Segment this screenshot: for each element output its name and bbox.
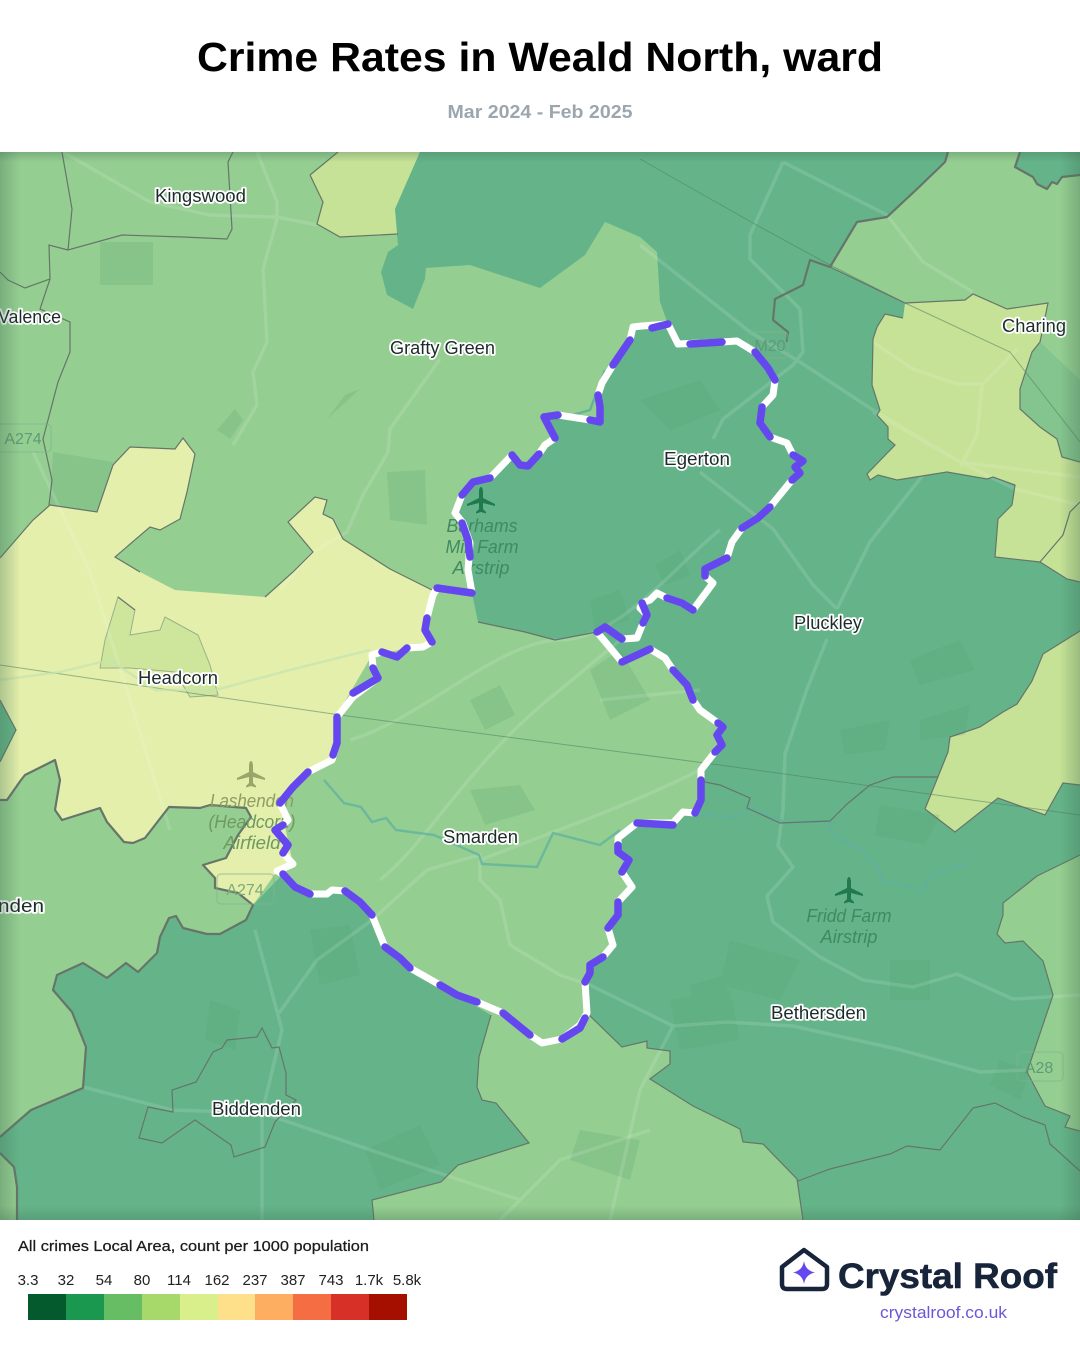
place labels: Biddenden xyxy=(212,1099,301,1119)
region: Headcorn centre xyxy=(100,597,218,697)
legend title: All crimes Local Area, count per 1000 population xyxy=(18,1239,369,1255)
place labels: Kingswood xyxy=(155,186,246,206)
region: Charing xyxy=(867,294,1080,582)
legend scale labels: 80 xyxy=(134,1272,150,1289)
legend xyxy=(18,1239,422,1320)
airstrip: Lashenden (Headcorn) Airfield: (Headcorn) xyxy=(208,812,296,832)
region: dark green north, Egerton, Pluckley, Bethersden xyxy=(381,152,1080,1220)
airstrip: Barhams Mill Farm: Barhams xyxy=(446,516,518,536)
railway line xyxy=(0,159,1080,815)
legend scale labels: 1.7k xyxy=(355,1272,384,1289)
subtitle: date range: Mar 2024 - Feb 2025 xyxy=(448,102,632,122)
place labels xyxy=(0,186,1066,1119)
icon: house with star xyxy=(782,1250,827,1289)
airstrip: Lashenden (Headcorn) Airfield xyxy=(208,761,296,853)
road label A274 west: A274 xyxy=(4,431,42,448)
airstrip: Fridd Farm: Airstrip xyxy=(819,927,878,947)
place labels: Smarden xyxy=(443,827,518,847)
legend scale labels: 743 xyxy=(318,1272,344,1289)
region: dark green Biddenden xyxy=(0,874,529,1220)
airstrip: Lashenden (Headcorn) Airfield: Lashenden xyxy=(210,791,294,811)
region: north pale patch xyxy=(310,152,420,237)
logo wordmark: Crystal Roof xyxy=(838,1257,1057,1296)
place labels: Headcorn xyxy=(138,668,218,688)
legend scale labels xyxy=(18,1272,422,1289)
place labels: Egerton xyxy=(664,449,730,469)
place labels: Charing xyxy=(1002,316,1066,336)
airstrip: Lashenden (Headcorn) Airfield: Airfield xyxy=(222,833,282,853)
road label M20: M20 xyxy=(754,338,786,355)
legend scale labels: 32 xyxy=(58,1272,74,1289)
airstrip: Barhams Mill Farm xyxy=(446,487,518,578)
legend scale labels: 54 xyxy=(96,1272,112,1289)
airstrip: Fridd Farm xyxy=(806,877,892,947)
airstrip: Fridd Farm: Fridd Farm xyxy=(806,906,892,926)
region: pale yellow Headcorn xyxy=(0,438,432,905)
title: Crime Rates in Weald North, ward xyxy=(197,34,883,80)
legend scale labels: 114 xyxy=(167,1272,191,1289)
region: small pale corner xyxy=(933,152,948,162)
roads xyxy=(33,152,1080,1220)
region: top right and edge patches xyxy=(0,152,1080,762)
legend scale labels: 387 xyxy=(280,1272,306,1289)
website url: crystalroof.co.uk xyxy=(880,1304,1008,1322)
legend scale labels: 3.3 xyxy=(18,1272,38,1289)
legend scale labels: 237 xyxy=(242,1272,268,1289)
ward boundary: Weald North xyxy=(275,324,803,1043)
road label A274 south: A274 xyxy=(226,882,264,899)
logo: Crystal Roof xyxy=(782,1250,1057,1322)
choropleth map xyxy=(0,152,1080,1220)
airstrip: Barhams Mill Farm: Airstrip xyxy=(451,558,510,578)
region: lower right pale patch xyxy=(925,631,1080,832)
place labels: Pluckley xyxy=(794,613,862,633)
legend scale labels: 5.8k xyxy=(393,1272,422,1289)
district boundaries xyxy=(0,152,1080,1220)
legend colour ramp xyxy=(28,1294,407,1320)
rivers xyxy=(0,370,968,890)
map edge shading xyxy=(0,152,1080,1220)
airstrip: Barhams Mill Farm: Mill Farm xyxy=(446,537,518,557)
region: east greener wedge xyxy=(1020,342,1080,462)
road label A28: A28 xyxy=(1025,1060,1053,1077)
road shields xyxy=(0,332,1063,1081)
legend scale labels: 162 xyxy=(204,1272,230,1289)
place labels: Grafty Green xyxy=(390,338,495,358)
place labels: Bethersden xyxy=(771,1003,866,1023)
woodland patches xyxy=(50,242,1030,1190)
